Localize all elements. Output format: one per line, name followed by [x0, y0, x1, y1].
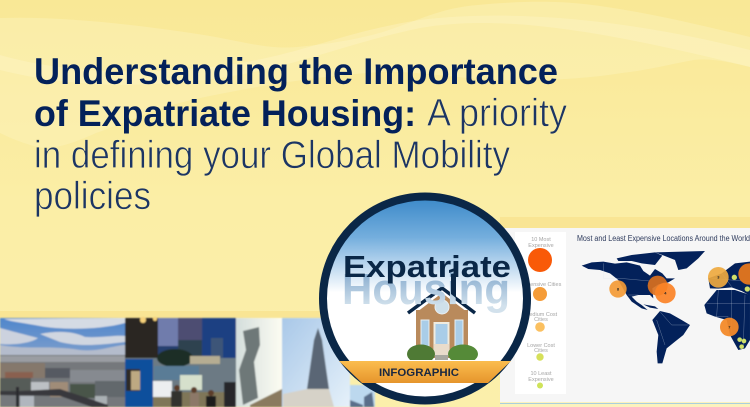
badge word: Expatriate: Expatriate — [343, 249, 511, 284]
map bubbles — [609, 263, 750, 349]
decorative wave bands — [0, 2, 750, 148]
photo: cropped building — [350, 385, 375, 407]
photo: city skyline — [0, 318, 125, 407]
legend: Expensive Cities — [521, 282, 562, 288]
title — [34, 51, 567, 218]
legend: Expensive — [528, 243, 554, 249]
title: Understanding the Importance — [34, 51, 558, 92]
panel: map — [500, 228, 750, 407]
photo: night street — [125, 317, 236, 407]
map bubbles: 4 — [664, 290, 667, 295]
map bubbles: 8 — [617, 286, 620, 291]
photo strip — [0, 317, 375, 407]
legend: Lower Cost — [527, 343, 555, 349]
band: strip above photos — [0, 311, 330, 318]
legend: Expensive — [528, 377, 554, 383]
banner: infographic: INFOGRAPHIC — [379, 367, 459, 379]
map bubbles: 3 — [717, 275, 720, 280]
title: policies — [34, 175, 151, 218]
legend: Medium Cost — [525, 312, 558, 318]
badge — [323, 196, 527, 400]
icon: house — [400, 288, 484, 364]
legend: 10 Most — [531, 237, 551, 243]
photo: spire tower — [282, 318, 350, 407]
title: in defining your Global Mobility — [34, 134, 510, 177]
world map — [582, 251, 750, 363]
legend: 10 Least — [530, 371, 552, 377]
legend: Cities — [534, 348, 548, 354]
banner: infographic — [339, 361, 511, 383]
legend: Cities — [534, 317, 548, 323]
photo: twisted tower — [236, 318, 282, 407]
title: A priority — [427, 92, 567, 135]
title: of Expatriate Housing: — [34, 93, 416, 134]
badge word: Housing: Housing — [342, 265, 510, 314]
legend — [515, 232, 566, 394]
map bubbles: 7 — [728, 324, 731, 329]
band: strip behind map panel — [500, 217, 750, 228]
housing i stem — [449, 267, 458, 298]
